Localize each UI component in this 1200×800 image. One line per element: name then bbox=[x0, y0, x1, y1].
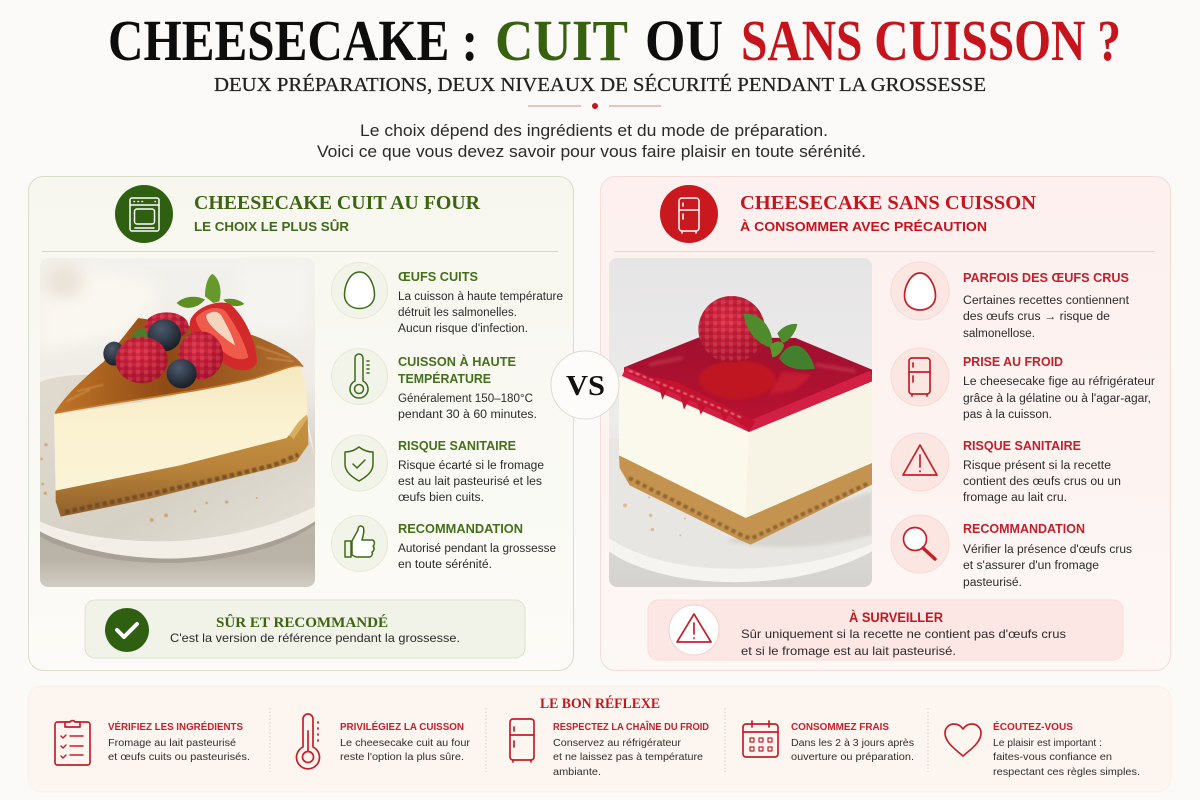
photo: no-bake cheesecake square bbox=[609, 258, 872, 587]
list: no-bake cheesecake facts bbox=[891, 262, 1155, 589]
tip: consommez frais bbox=[743, 721, 914, 763]
item: prise au froid: pas à la cuisson. bbox=[963, 409, 1052, 421]
callout: a surveiller: et si le fromage est au lait pasteurisé. bbox=[741, 644, 956, 658]
tip: respectez la chaine du froid: et ne laissez pas à température bbox=[553, 752, 703, 763]
panel heading bbox=[194, 192, 481, 234]
intro text: Voici ce que vous devez savoir pour vous faire plaisir en toute sérénité. bbox=[317, 143, 866, 161]
item: recommandation: Vérifier la présence d'œufs crus bbox=[963, 544, 1132, 556]
item: recommandation bbox=[891, 515, 1132, 589]
title: CUIT bbox=[495, 8, 628, 73]
item: recommandation bbox=[332, 516, 556, 572]
panel heading: LE CHOIX LE PLUS SÛR bbox=[194, 219, 350, 234]
tip: consommez frais: CONSOMMEZ FRAIS bbox=[791, 722, 889, 733]
item: prise au froid: Le cheesecake fige au réfrigérateur bbox=[963, 376, 1155, 388]
item: recommandation: pasteurisé. bbox=[963, 577, 1022, 589]
caramel top bbox=[55, 318, 303, 413]
panel heading: À CONSOMMER AVEC PRÉCAUTION bbox=[740, 219, 987, 234]
item: oeufs cuits: détruit les salmonelles. bbox=[398, 307, 517, 319]
cake cream side bbox=[54, 362, 308, 491]
tip: respectez la chaine du froid: RESPECTEZ LA CHAÎNE DU FROID bbox=[553, 720, 709, 733]
panel heading: CHEESECAKE SANS CUISSON bbox=[740, 192, 1037, 214]
item: recommandation: en toute sérénité. bbox=[398, 559, 492, 571]
title bbox=[108, 8, 1121, 73]
item: parfois des oeufs crus: des œufs crus → risque de bbox=[963, 311, 1110, 323]
glaze top bbox=[624, 337, 872, 432]
tip: privilegiez la cuisson: PRIVILÉGIEZ LA CUISSON bbox=[340, 720, 464, 733]
item: prise au froid bbox=[891, 348, 1155, 421]
item: oeufs cuits: Aucun risque d'infection. bbox=[398, 323, 528, 335]
panel: le bon reflexe bbox=[28, 686, 1171, 792]
list: baked cheesecake facts bbox=[332, 262, 563, 572]
item: risque sanitaire: RISQUE SANITAIRE bbox=[398, 439, 516, 453]
tip: consommez frais: ouverture ou préparation. bbox=[791, 752, 914, 763]
item: oeufs cuits: ŒUFS CUITS bbox=[398, 270, 478, 284]
item: parfois des oeufs crus: Certaines recettes contiennent bbox=[963, 295, 1130, 307]
subtitle: DEUX PRÉPARATIONS, DEUX NIVEAUX DE SÉCURITÉ PENDANT LA GROSSESSE bbox=[214, 73, 986, 96]
tip: privilegiez la cuisson bbox=[296, 714, 471, 769]
tip: ecoutez-vous: faites-vous confiance en bbox=[993, 752, 1112, 763]
icon: fridge bbox=[660, 185, 718, 243]
vs badge bbox=[551, 351, 619, 419]
plate bbox=[609, 538, 872, 582]
panel heading: CHEESECAKE CUIT AU FOUR bbox=[194, 192, 481, 214]
tip: ecoutez-vous: respectant ces règles simples. bbox=[993, 767, 1140, 778]
tip: respectez la chaine du froid: Conservez au réfrigérateur bbox=[553, 738, 682, 749]
item: cuisson a haute temperature: Généralement 150–180°C bbox=[398, 393, 533, 405]
title: OU bbox=[645, 8, 723, 73]
vs badge: VS bbox=[566, 370, 605, 402]
item: risque sanitaire bbox=[891, 433, 1121, 504]
raspberry and mint bbox=[698, 296, 765, 363]
item: parfois des oeufs crus bbox=[891, 262, 1130, 340]
panel: cheesecake cuit au four bbox=[28, 176, 574, 670]
item: cuisson a haute temperature bbox=[332, 348, 537, 421]
tip: privilegiez la cuisson: reste l'option la plus sûre. bbox=[340, 752, 464, 763]
cake crust bbox=[619, 455, 872, 545]
item: prise au froid: PRISE AU FROID bbox=[963, 355, 1063, 369]
panel: cheesecake sans cuisson bbox=[600, 176, 1170, 670]
callout: sur et recommande: SÛR ET RECOMMANDÉ bbox=[216, 614, 388, 631]
item: risque sanitaire: est au lait pasteurisé et les bbox=[398, 476, 542, 488]
tip: ecoutez-vous bbox=[945, 720, 1140, 778]
callout: a surveiller: À SURVEILLER bbox=[849, 610, 943, 625]
title ornament bbox=[528, 103, 661, 109]
item: prise au froid: grâce à la gélatine ou à l'agar-agar, bbox=[963, 393, 1151, 405]
callout: sur et recommande bbox=[85, 600, 525, 658]
panel heading bbox=[740, 192, 1037, 234]
item: risque sanitaire: contient des œufs crus ou un bbox=[963, 476, 1121, 488]
title: SANS CUISSON ? bbox=[741, 8, 1121, 73]
item: oeufs cuits: La cuisson à haute température bbox=[398, 291, 563, 303]
icon: oven bbox=[115, 185, 173, 243]
item: cuisson a haute temperature: CUISSON À HAUTE bbox=[398, 354, 516, 369]
item: risque sanitaire: RISQUE SANITAIRE bbox=[963, 439, 1081, 453]
item: recommandation: Autorisé pendant la grossesse bbox=[398, 543, 556, 555]
tip: verifiez les ingredients bbox=[55, 720, 250, 765]
item: recommandation: RECOMMANDATION bbox=[398, 522, 523, 536]
item: recommandation: et s'assurer d'un fromage bbox=[963, 560, 1099, 572]
item: risque sanitaire: œufs bien cuits. bbox=[398, 492, 484, 504]
berries and mint bbox=[205, 274, 220, 303]
item: parfois des oeufs crus: salmonellose. bbox=[963, 328, 1035, 340]
tip: verifiez les ingredients: Fromage au lait pasteurisé bbox=[108, 738, 236, 749]
band heading: LE BON RÉFLEXE bbox=[540, 695, 660, 712]
callout: a surveiller bbox=[648, 600, 1123, 660]
crumbs bbox=[623, 496, 686, 536]
tip: consommez frais: Dans les 2 à 3 jours après bbox=[791, 738, 914, 749]
cake crust bbox=[56, 416, 308, 517]
photo: baked cheesecake slice bbox=[40, 258, 315, 587]
item: cuisson a haute temperature: pendant 30 à 60 minutes. bbox=[398, 409, 537, 421]
intro text bbox=[317, 122, 866, 161]
item: risque sanitaire bbox=[332, 435, 544, 504]
plate bbox=[40, 424, 315, 558]
tip: ecoutez-vous: ÉCOUTEZ-VOUS bbox=[993, 720, 1073, 733]
item: parfois des oeufs crus: PARFOIS DES ŒUFS CRUS bbox=[963, 271, 1129, 285]
item: oeufs cuits bbox=[332, 262, 563, 335]
item: recommandation: RECOMMANDATION bbox=[963, 522, 1085, 536]
tip: respectez la chaine du froid: ambiante. bbox=[553, 767, 601, 778]
item: risque sanitaire: fromage au lait cru. bbox=[963, 492, 1067, 504]
item: risque sanitaire: Risque écarté si le fromage bbox=[398, 460, 544, 472]
callout: a surveiller: Sûr uniquement si la recette ne contient pas d'œufs crus bbox=[741, 627, 1066, 641]
tip: respectez la chaine du froid bbox=[510, 719, 709, 778]
tip: verifiez les ingredients: VÉRIFIEZ LES INGRÉDIENTS bbox=[108, 720, 243, 733]
intro text: Le choix dépend des ingrédients et du mode de préparation. bbox=[360, 122, 828, 140]
item: cuisson a haute temperature: TEMPÉRATURE bbox=[398, 371, 491, 386]
crumbs bbox=[40, 443, 258, 522]
callout: sur et recommande: C'est la version de référence pendant la grossesse. bbox=[170, 631, 460, 645]
cake cream sides bbox=[619, 376, 749, 518]
tip: ecoutez-vous: Le plaisir est important : bbox=[993, 738, 1102, 749]
tip: verifiez les ingredients: et œufs cuits ou pasteurisés. bbox=[108, 752, 250, 763]
item: risque sanitaire: Risque présent si la recette bbox=[963, 460, 1111, 472]
tip: privilegiez la cuisson: Le cheesecake cuit au four bbox=[340, 738, 471, 749]
title: CHEESECAKE : bbox=[108, 8, 478, 73]
